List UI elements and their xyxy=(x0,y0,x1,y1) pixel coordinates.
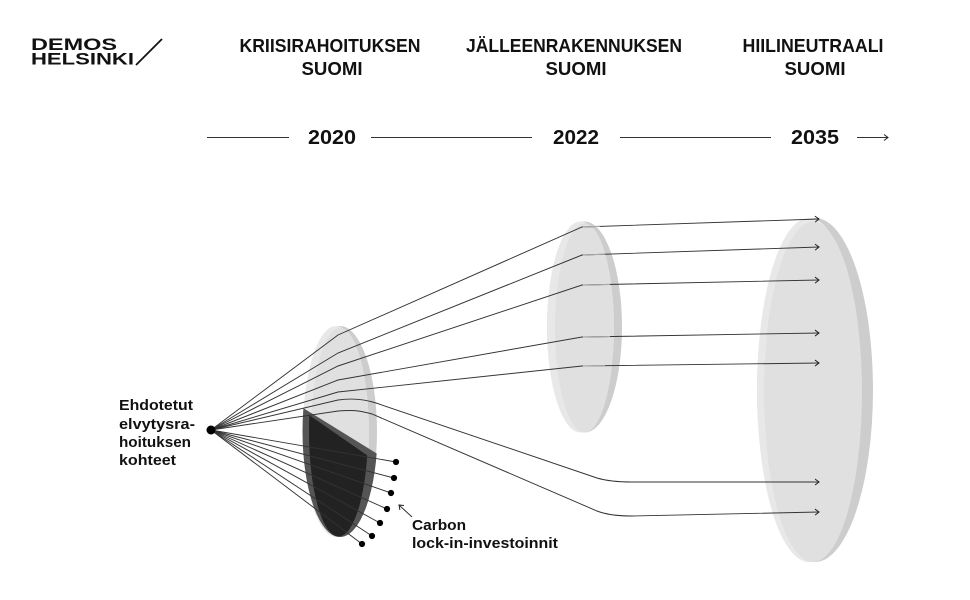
label: Carbon lock-in-investoinnit: lock-in-investoinnit xyxy=(412,535,558,552)
heading: Jälleenrakennuksen Suomi: SUOMI xyxy=(546,59,606,79)
label: Carbon lock-in-investoinnit xyxy=(412,517,558,552)
heading: Hiilineutraali Suomi xyxy=(742,36,884,79)
logo: Demos Helsinki: DEMOS xyxy=(31,36,117,54)
heading: Hiilineutraali Suomi: HIILINEUTRAALI xyxy=(742,36,884,56)
heading: Kriisirahoituksen Suomi xyxy=(240,36,420,79)
label: Ehdotetut elvytysrahoituksen kohteet: Ehdotetut xyxy=(119,397,193,414)
origin dot xyxy=(206,426,216,434)
timeline with years: 2020 xyxy=(308,127,356,149)
lines: to hiilineutraali 2035 xyxy=(211,219,819,516)
disc: 2022 xyxy=(547,222,622,432)
label: Ehdotetut elvytysrahoituksen kohteet: elvytysra- xyxy=(119,416,195,433)
arrow: to carbon lock-in xyxy=(399,505,412,517)
label: Ehdotetut elvytysrahoituksen kohteet xyxy=(119,397,195,469)
heading: Hiilineutraali Suomi: SUOMI xyxy=(784,59,846,79)
timeline with years: 2035 xyxy=(791,127,839,149)
disc: 2035 xyxy=(757,218,873,562)
label: Ehdotetut elvytysrahoituksen kohteet: hoituksen xyxy=(119,434,191,451)
heading: Kriisirahoituksen Suomi: SUOMI xyxy=(302,59,362,79)
heading: Jälleenrakennuksen Suomi xyxy=(466,36,682,79)
timeline with years: 2022 xyxy=(553,127,599,149)
lines: to carbon lock-in dots xyxy=(211,430,399,547)
logo: Demos Helsinki: HELSINKI xyxy=(31,50,134,68)
label: Carbon lock-in-investoinnit: Carbon xyxy=(412,517,466,534)
label: Ehdotetut elvytysrahoituksen kohteet: kohteet xyxy=(119,452,176,469)
carbon lock-in dark segment xyxy=(302,408,377,537)
timeline with years xyxy=(207,127,888,149)
heading: Kriisirahoituksen Suomi: KRIISIRAHOITUKSEN xyxy=(240,36,420,56)
logo: Demos Helsinki xyxy=(31,36,162,68)
heading: Jälleenrakennuksen Suomi: JÄLLEENRAKENNUKSEN xyxy=(466,36,682,56)
disc: 2020 xyxy=(303,326,377,537)
